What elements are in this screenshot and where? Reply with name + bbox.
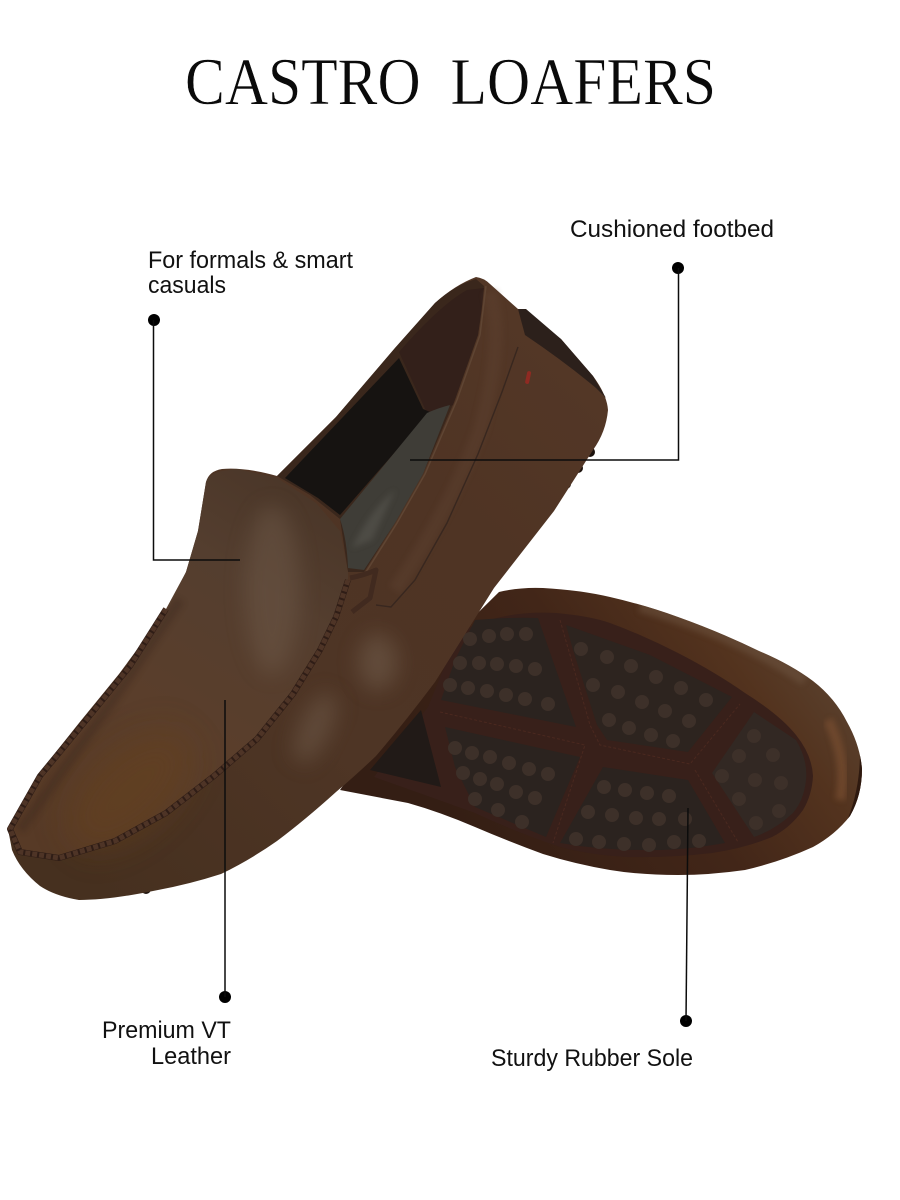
callout: rubber sole	[491, 808, 693, 1072]
tread panel: top right	[566, 625, 732, 752]
side band highlight	[395, 292, 496, 590]
heel tab	[518, 309, 606, 398]
tread ribs stitching	[440, 620, 740, 843]
callout text: For formals & smart	[148, 247, 353, 274]
side seam	[376, 347, 518, 607]
tread panel: toe	[712, 712, 806, 837]
moccasin stitching	[10, 570, 376, 858]
shoe: rubber sole view	[340, 588, 862, 875]
callout dot	[672, 262, 684, 274]
tread panel: top centre	[441, 618, 576, 727]
callout text: Sturdy Rubber Sole	[491, 1045, 693, 1072]
callout: formals and smart casuals	[148, 247, 353, 560]
callout line	[224, 700, 226, 997]
inner rim edge	[366, 286, 486, 572]
tread panel: lower centre	[445, 727, 580, 837]
callout text: casuals	[148, 272, 226, 299]
vamp highlight band	[248, 512, 298, 666]
callout line	[410, 268, 678, 460]
callout dot	[680, 1015, 692, 1027]
tread panels	[370, 618, 806, 850]
title: CASTRO LOAFERS	[185, 45, 716, 119]
vamp panel	[10, 469, 348, 858]
callout text: Leather	[151, 1043, 231, 1070]
sole outer rim	[340, 588, 862, 875]
tread panel: heel	[370, 710, 441, 787]
lining wall	[285, 358, 430, 515]
driving studs	[141, 447, 595, 894]
toe warm glow	[47, 710, 213, 870]
callout line	[686, 808, 688, 1021]
shoe: upper side view	[8, 277, 608, 900]
rim shading	[640, 606, 862, 820]
footbed	[340, 405, 450, 570]
callout: cushioned footbed	[410, 216, 774, 460]
red tag	[525, 371, 531, 384]
callout dot	[148, 314, 160, 326]
callout: premium leather	[102, 700, 231, 1070]
footbed shading	[352, 490, 395, 548]
callout text: Premium VT	[102, 1017, 231, 1044]
left dark edge	[20, 600, 180, 830]
tread studs	[443, 627, 788, 852]
sole inner border	[374, 613, 813, 857]
collar interior	[399, 288, 484, 413]
callout text: Cushioned footbed	[570, 216, 774, 243]
shoe opening rim	[277, 279, 484, 572]
side highlight upper	[358, 634, 398, 690]
tread panel: lower right	[560, 767, 725, 850]
leather lighting	[20, 505, 398, 870]
callout line	[154, 320, 240, 560]
shoe silhouette	[8, 277, 608, 900]
callout dot	[219, 991, 231, 1003]
side highlight lower	[294, 696, 336, 760]
